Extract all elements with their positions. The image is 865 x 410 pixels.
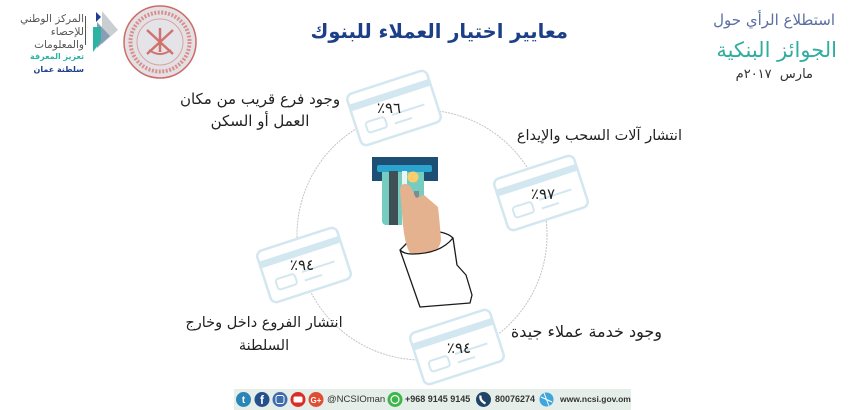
label: nearby branch: العمل أو السكن <box>211 112 309 130</box>
icon: hand inserting card into ATM <box>372 157 472 307</box>
footer social icons: t <box>242 395 246 406</box>
label: nearby branch: وجود فرع قريب من مكان <box>180 90 340 108</box>
header: survey title: استطلاع الرأي حول <box>713 11 835 29</box>
footer social icons: f <box>260 393 265 407</box>
logo: NCSI text: المركز الوطني <box>20 13 84 25</box>
label: branches: انتشار الفروع داخل وخارج <box>185 315 343 331</box>
logo: Oman: سلطنة عمان <box>34 65 84 74</box>
footer: whatsapp number: +968 9145 9145 <box>405 394 470 404</box>
header: date: مارس ٢٠١٧م <box>736 67 813 82</box>
footer: phone number: 80076274 <box>495 394 535 404</box>
dashed circle <box>297 110 547 360</box>
value: 94 percent left: ٩٤٪ <box>290 256 314 274</box>
logo: NCSI text: للإحصاء <box>51 26 84 38</box>
footer: website: www.ncsi.gov.om <box>560 394 631 404</box>
logo: NCSI mark <box>85 11 118 52</box>
footer: handle: @NCSIOman <box>327 394 385 405</box>
label: ATMs: انتشار آلات السحب والإيداع <box>517 128 682 144</box>
logo: central bank seal <box>124 6 196 78</box>
icon: card top left <box>346 69 442 147</box>
icon: card right <box>493 154 589 232</box>
footer social icons: G+ <box>311 396 322 405</box>
icon: card left <box>256 226 352 304</box>
logo: NCSI text: والمعلومات <box>34 39 84 51</box>
label: branches <box>185 315 343 354</box>
value: 96 percent: ٩٦٪ <box>377 99 401 117</box>
footer bar background <box>234 389 631 410</box>
logo: NCSI slogan: تعزيز المعرفة <box>30 52 84 61</box>
value: 97 percent: ٩٧٪ <box>531 185 555 203</box>
footer social icons <box>236 392 554 407</box>
label: branches: السلطنة <box>239 338 289 354</box>
label: customer service: وجود خدمة عملاء جيدة <box>511 322 662 341</box>
title: معايير اختيار العملاء للبنوك <box>310 20 568 43</box>
header: survey subject: الجوائز البنكية <box>716 38 837 62</box>
logo: NCSI text <box>20 13 84 51</box>
icon: card bottom <box>409 308 505 386</box>
label: nearby branch <box>180 90 340 130</box>
value: 94 percent bottom: ٩٤٪ <box>447 339 471 357</box>
